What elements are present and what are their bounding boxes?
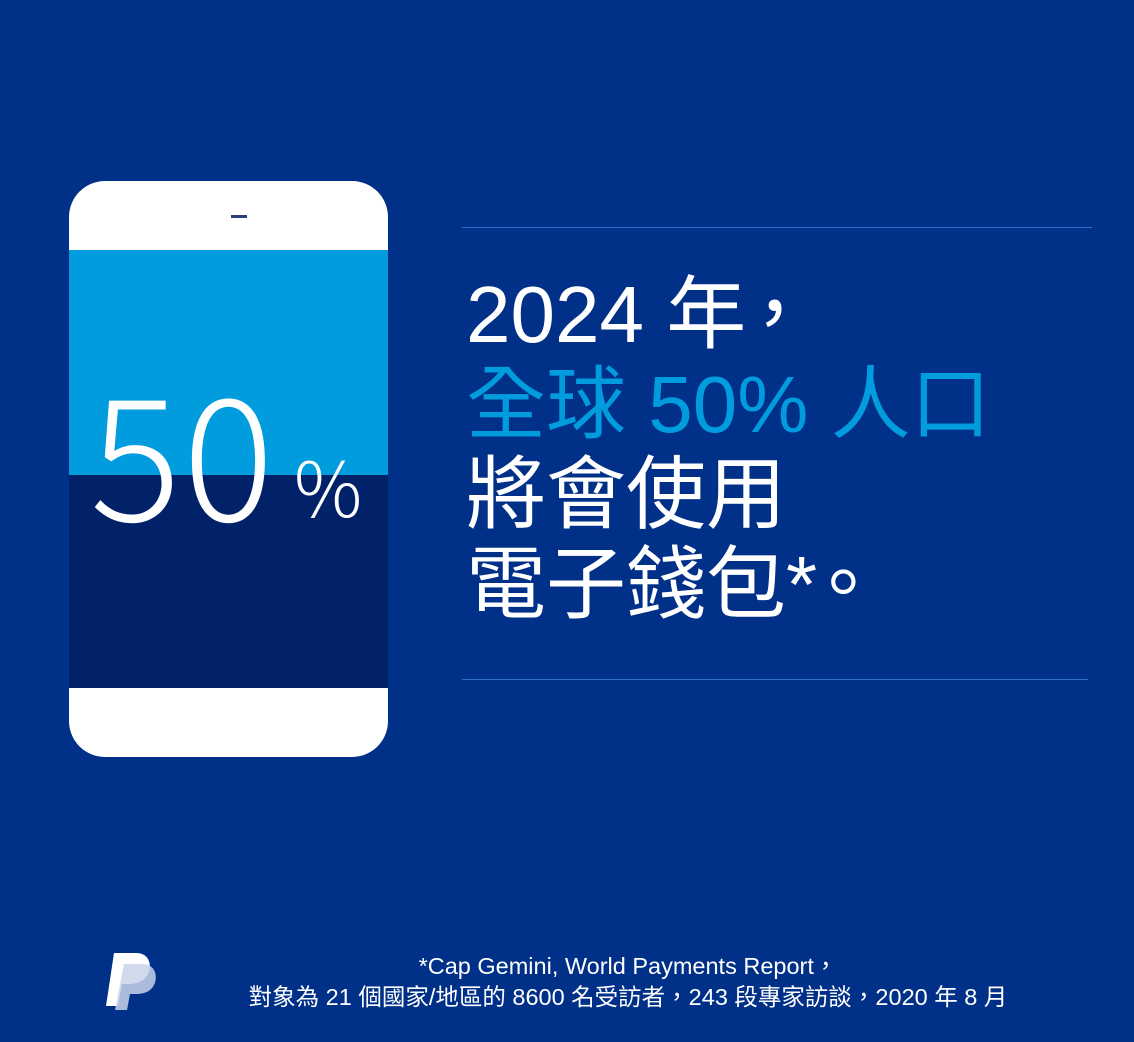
- number 50: 50: [90, 324, 276, 570]
- headline: 2024 年，: [466, 250, 814, 366]
- headline: 全球 50% 人口: [466, 360, 991, 449]
- fill: dark blue: [69, 475, 388, 688]
- headline: 將會使用: [466, 450, 786, 539]
- footnote: *Cap Gemini, World Payments Report，: [419, 953, 837, 979]
- divider bottom: [462, 679, 1088, 680]
- speaker: [231, 215, 247, 218]
- footnote: [249, 953, 1007, 1010]
- fill: light blue: [69, 250, 388, 475]
- footnote: 對象為 21 個國家/地區的 8600 名受訪者，243 段專家訪談，2020 年 8 月: [249, 984, 1007, 1010]
- percent sign: %: [294, 429, 362, 539]
- logo: PayPal: [106, 953, 156, 1010]
- headline: [466, 250, 991, 629]
- phone: [69, 181, 388, 757]
- headline: 電子錢包*。: [466, 540, 883, 629]
- divider top: [462, 227, 1092, 228]
- big percentage: [90, 324, 362, 570]
